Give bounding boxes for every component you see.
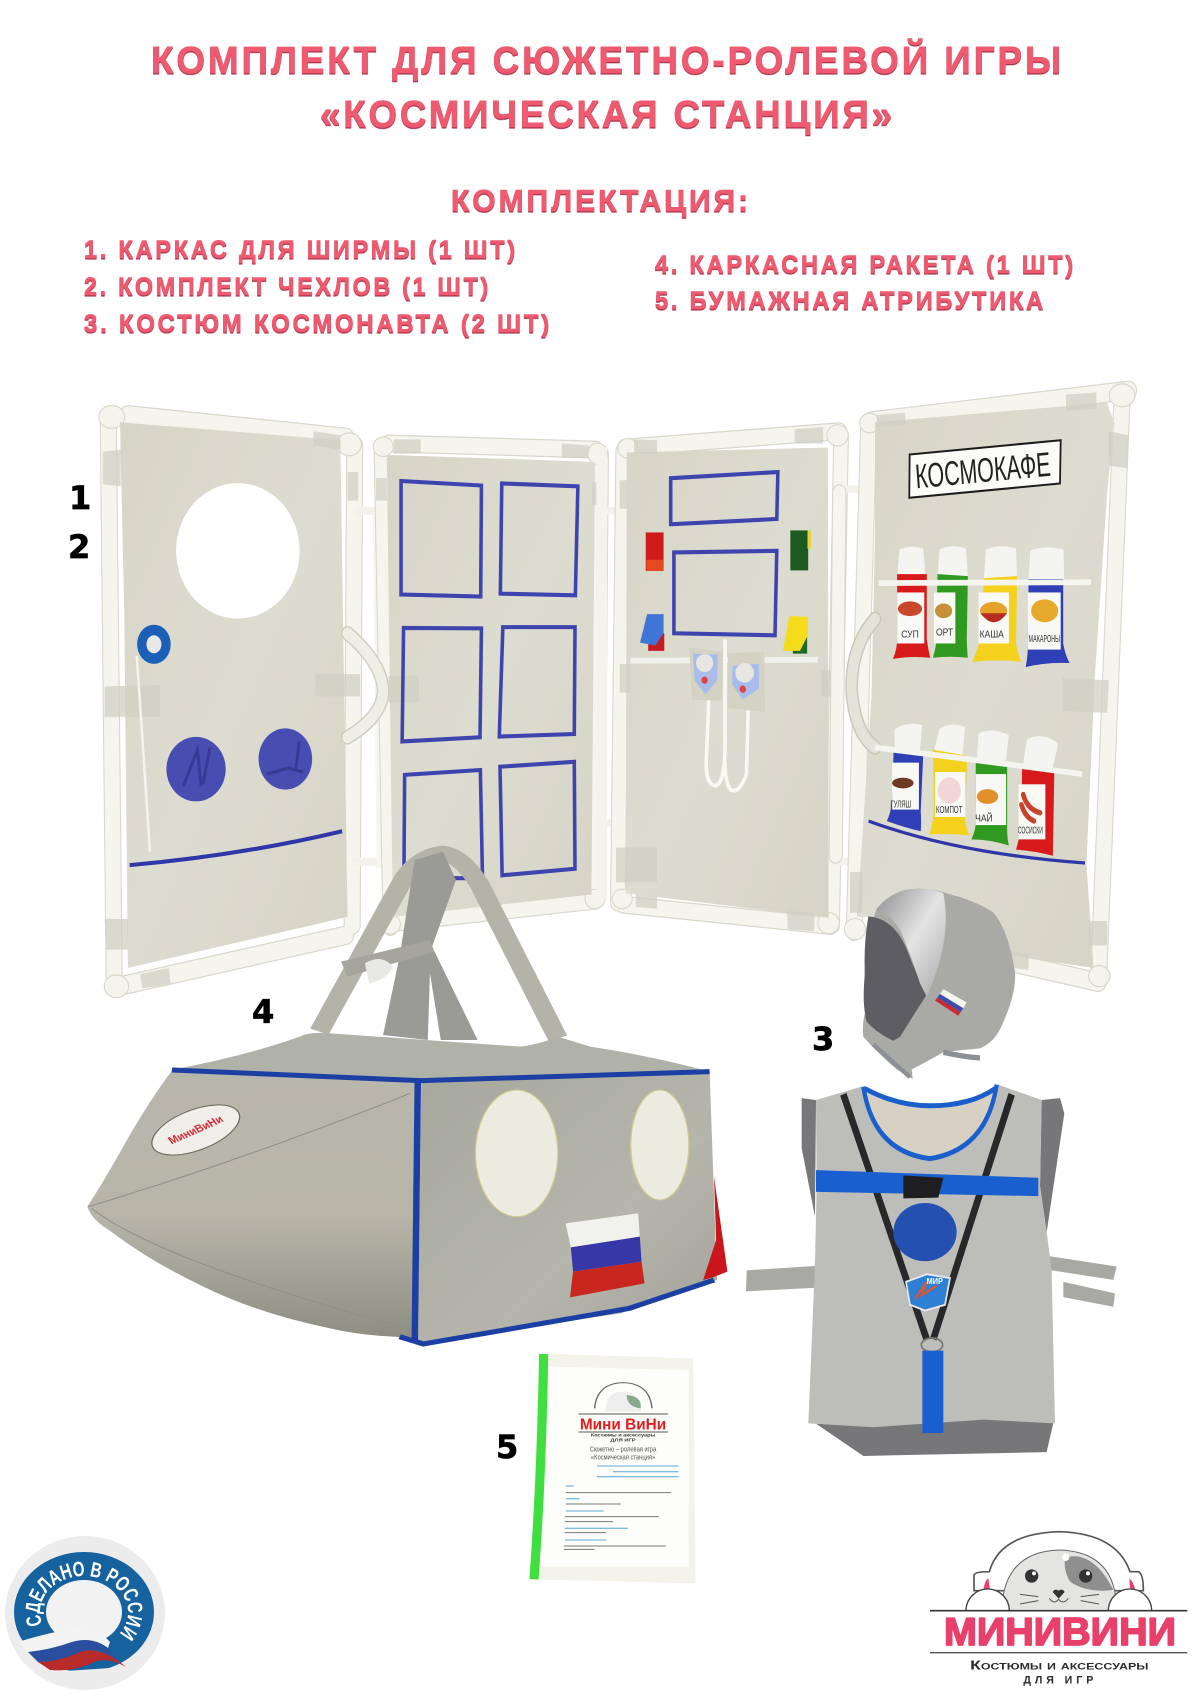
item number 4: 4 <box>252 993 274 1031</box>
contents list: right column <box>655 251 1076 315</box>
item number 3: 3 <box>812 1020 834 1058</box>
red tag <box>703 1177 727 1280</box>
pocket left <box>166 737 226 801</box>
yellow toggle <box>783 616 808 654</box>
blue ring <box>14 1552 154 1678</box>
harness straps <box>843 1094 1012 1339</box>
blue button <box>137 625 171 852</box>
pouch: cake <box>933 546 968 658</box>
tagline <box>970 1658 1149 1686</box>
windows <box>475 1090 689 1217</box>
kit title: Сюжетно – ролевая игра <box>590 1445 656 1453</box>
contents list: right column: 5. БУМАЖНАЯ АТРИБУТИКА <box>655 287 1046 315</box>
contents list: left column <box>84 236 552 338</box>
seal in helmet <box>966 1532 1152 1611</box>
wordmark: МИНИВИНИ <box>944 1610 1176 1654</box>
heading: contents: КОМПЛЕКТАЦИЯ: <box>451 183 751 218</box>
handle <box>852 619 875 748</box>
brand logo <box>930 1532 1187 1686</box>
contents list: left column: 1. КАРКАС ДЛЯ ШИРМЫ (1 ШТ) <box>84 236 518 264</box>
kit logo: Костюмы и аксессуары <box>591 1433 655 1438</box>
oxygen pads with ropes <box>689 639 765 791</box>
screen connector clips <box>353 509 383 868</box>
fabric <box>120 422 347 968</box>
side face <box>418 1072 717 1343</box>
side ties <box>746 1256 1117 1307</box>
rocket bag <box>87 852 727 1344</box>
item number 2: 2 <box>68 528 90 566</box>
title <box>151 37 1064 136</box>
pocket right <box>259 728 312 790</box>
contents list: left column: 3. КОСТЮМ КОСМОНАВТА (2 ШТ) <box>84 310 552 338</box>
red toggle <box>646 532 664 571</box>
blue toggle <box>640 614 664 651</box>
badge lettering: СДЕЛАНО В РОССИИ <box>26 1562 142 1642</box>
pouch: sausages <box>1016 736 1058 856</box>
pouch: cake: ОРТ <box>936 627 954 637</box>
pouch: porridge: КАША <box>980 629 1005 639</box>
mission patch <box>906 1274 950 1311</box>
pouch: soup: СУП <box>901 629 919 639</box>
pouch: tea: ЧАЙ <box>975 812 993 824</box>
contents list: right column: 4. КАРКАСНАЯ РАКЕТА (1 ШТ) <box>655 251 1076 279</box>
carrying handles <box>319 852 558 1040</box>
sign: КОСМОКАФЕ <box>914 445 1052 496</box>
pouch: porridge <box>972 546 1021 662</box>
badge: made in Russia <box>5 1536 165 1690</box>
tagline: Костюмы и аксессуары <box>970 1658 1149 1672</box>
item number 1: 1 <box>69 479 91 517</box>
flag <box>566 1213 645 1297</box>
kit title <box>590 1445 656 1461</box>
screen panel 2: transparent pockets <box>373 437 607 934</box>
pouch: pasta <box>1026 547 1070 667</box>
pouch: tea <box>971 731 1009 846</box>
pouch: sausages: СОСИСКИ <box>1018 825 1043 835</box>
pocket grid <box>401 481 578 878</box>
pouch: goulash: ГУЛЯШ <box>890 799 911 810</box>
lower strap and ring <box>921 1338 943 1433</box>
cosmonaut helmet <box>863 889 1015 1079</box>
mission patch: МИР <box>927 1277 943 1286</box>
blue disc <box>893 1203 957 1261</box>
contents list: left column: 2. КОМПЛЕКТ ЧЕХЛОВ (1 ШТ) <box>84 273 491 301</box>
title: КОМПЛЕКТ ДЛЯ СЮЖЕТНО-РОЛЕВОЙ ИГРЫ <box>151 37 1064 82</box>
porthole <box>176 483 300 619</box>
cosmonaut vest <box>746 1085 1117 1456</box>
paper kit in zip folder <box>530 1353 696 1583</box>
tagline: ДЛЯ ИГР <box>1023 1674 1093 1686</box>
pouch: pasta: МАКАРОНЫ <box>1029 634 1060 644</box>
top face <box>171 1033 710 1081</box>
helmet flag <box>935 989 967 1016</box>
item number 5: 5 <box>496 1428 518 1466</box>
screen panel 4: space cafe <box>829 384 1135 987</box>
pouch: goulash <box>887 724 923 831</box>
title: «КОСМИЧЕСКАЯ СТАНЦИЯ» <box>320 94 895 136</box>
screen panel 1: porthole <box>99 406 361 998</box>
kit logo: ДЛЯ ИГР <box>610 1438 636 1443</box>
vest back layer <box>802 1098 1064 1456</box>
green zip <box>534 1354 544 1579</box>
nose <box>87 1071 417 1337</box>
vest body <box>808 1085 1055 1427</box>
panel 1 handle <box>347 633 383 737</box>
logo patch <box>141 1095 250 1165</box>
pouch: compote <box>929 725 970 835</box>
flag ribbon <box>18 1628 126 1670</box>
pouch: compote: КОМПОТ <box>936 805 963 815</box>
kit logo <box>579 1383 668 1443</box>
logo patch: МиниВиНи <box>165 1113 226 1147</box>
kit logo: Мини ВиНи <box>580 1415 666 1433</box>
green toggle <box>790 530 811 570</box>
kit title: «Космическая станция» <box>591 1453 655 1461</box>
screen panel 3: control board <box>600 425 848 934</box>
chest strap and buckle <box>816 1170 1038 1198</box>
display frames <box>671 472 778 635</box>
piping <box>172 1070 714 1344</box>
pouch: soup <box>893 547 930 659</box>
